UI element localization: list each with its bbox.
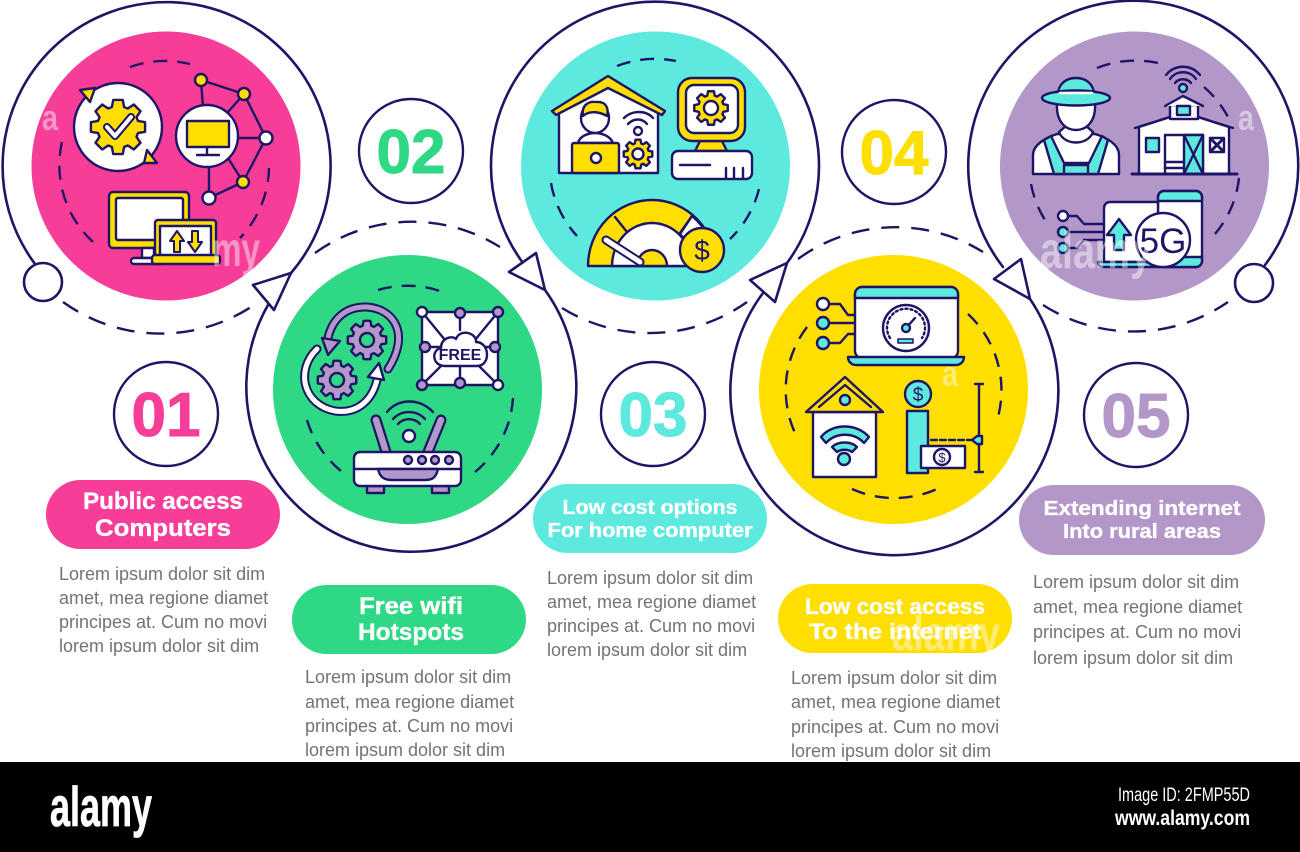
- stock watermark: a: [942, 353, 959, 394]
- text block: step 2: Lorem ipsum dolor sit dim: [305, 667, 511, 687]
- heading pill: extending internet: [1019, 485, 1265, 555]
- icon: connected barn: [1132, 67, 1237, 174]
- footer image id: Image ID: 2FMP55D: [1118, 785, 1250, 806]
- number 04: [842, 100, 946, 204]
- panel: low cost home computer: [521, 32, 790, 300]
- heading pill: low cost access: [778, 584, 1012, 653]
- icon: 5G devices: [1058, 191, 1202, 267]
- icon: networked monitor: [176, 74, 272, 204]
- stock watermark: alamy: [1040, 222, 1152, 280]
- text block: step 1: amet, mea regione diamet: [59, 588, 268, 608]
- text block: step 4: amet, mea regione diamet: [791, 692, 1000, 712]
- arrow: step 2 to 3: [509, 253, 545, 290]
- panel: public access computers: [32, 32, 300, 300]
- icon: free cloud network: [417, 307, 503, 390]
- icon: home wifi: [806, 377, 883, 477]
- text block: step 2: principes at. Cum no movi: [305, 716, 513, 736]
- stock watermark: my: [212, 224, 260, 277]
- footer website: www.alamy.com: [1114, 807, 1250, 830]
- heading pill: low cost options: Low cost options: [562, 496, 738, 519]
- icon: free cloud network: FREE: [439, 347, 482, 364]
- text block: step 5: amet, mea regione diamet: [1033, 597, 1242, 617]
- text block: step 5: principes at. Cum no movi: [1033, 622, 1241, 642]
- icon: cost slider with money: $: [913, 385, 924, 406]
- heading pill: low cost options: For home computer: [548, 519, 753, 542]
- text block: step 1: lorem ipsum dolor sit dim: [59, 636, 259, 656]
- icon: 5G devices: 5G: [1140, 222, 1186, 261]
- arrow: step 3 to 4: [750, 263, 787, 302]
- text block: step 5: lorem ipsum dolor sit dim: [1033, 648, 1233, 668]
- text block: step 1: Lorem ipsum dolor sit dim: [59, 564, 265, 584]
- icon: gear with check: [74, 83, 162, 171]
- step 2 ring and connectors: [246, 222, 576, 552]
- icon: laptop speedometer: [817, 287, 964, 365]
- stock watermark: a: [1238, 97, 1255, 138]
- footer logo: alamy: [50, 775, 152, 838]
- number 02: [359, 99, 463, 203]
- text block: step 4: Lorem ipsum dolor sit dim: [791, 668, 997, 688]
- heading pill: public access computers: [46, 480, 280, 549]
- icon: farmer: [1033, 78, 1119, 174]
- number 05: 05: [1102, 382, 1170, 451]
- heading pill: free wifi hotspots: [292, 585, 526, 654]
- heading pill: public access computers: Public access: [83, 488, 243, 515]
- icon: cost slider with money: [905, 381, 983, 473]
- text block: step 1: principes at. Cum no movi: [59, 612, 267, 632]
- text block: step 2: amet, mea regione diamet: [305, 692, 514, 712]
- text block: step 3: Lorem ipsum dolor sit dim: [547, 568, 753, 588]
- arrow: step 1 to 2: [253, 273, 291, 310]
- text block: step 3: principes at. Cum no movi: [547, 616, 755, 636]
- step 5 ring and connectors: [968, 1, 1298, 331]
- number 04: 04: [860, 119, 929, 188]
- text block: step 4: principes at. Cum no movi: [791, 717, 999, 737]
- heading pill: public access computers: Computers: [95, 515, 231, 542]
- text block: step 1: [59, 564, 268, 656]
- panel: low cost internet access: [759, 255, 1028, 524]
- number 05: [1084, 363, 1188, 467]
- text block: step 5: Lorem ipsum dolor sit dim: [1033, 572, 1239, 592]
- text block: step 3: lorem ipsum dolor sit dim: [547, 640, 747, 660]
- text block: step 4: [791, 668, 1000, 761]
- step 3 ring and connectors: [491, 2, 819, 333]
- text block: step 4: lorem ipsum dolor sit dim: [791, 741, 991, 761]
- stock watermark: a: [42, 97, 59, 138]
- heading pill: low cost access: To the internet: [809, 619, 982, 644]
- number 02: 02: [377, 118, 445, 187]
- text block: step 2: lorem ipsum dolor sit dim: [305, 740, 505, 760]
- text block: step 3: [547, 568, 756, 660]
- panel: extending internet into rural areas: [1000, 32, 1269, 300]
- number 03: 03: [619, 381, 687, 450]
- icon: speed gauge with dollar coin: $: [694, 235, 710, 266]
- number 03: [601, 362, 705, 466]
- step 4 ring and connectors: [730, 227, 1058, 555]
- text block: step 5: [1033, 572, 1242, 668]
- stock watermark: [42, 97, 1255, 661]
- icon: person working at home: [552, 76, 665, 173]
- heading pill: free wifi hotspots: Free wifi: [359, 593, 463, 620]
- number 01: 01: [132, 381, 200, 450]
- icon: desktop and laptop data exchange: [109, 192, 220, 264]
- footer bar: [0, 762, 1300, 852]
- heading pill: low cost access: Low cost access: [805, 594, 985, 619]
- stock watermark: alamy: [892, 608, 1000, 661]
- icon: monitor with settings: [672, 78, 752, 179]
- icon: speed gauge with dollar coin: [588, 200, 724, 272]
- panel: free wifi hotspots: [273, 255, 542, 524]
- heading pill: low cost options: [533, 484, 767, 553]
- number 01: [114, 362, 218, 466]
- icon: wifi router: [354, 402, 461, 493]
- heading pill: extending internet: Extending internet: [1044, 497, 1241, 520]
- heading pill: extending internet: Into rural areas: [1063, 520, 1221, 543]
- heading pill: free wifi hotspots: Hotspots: [358, 619, 464, 646]
- icon: cost slider with money: $: [938, 450, 946, 465]
- text block: step 3: amet, mea regione diamet: [547, 592, 756, 612]
- icon: rotating gears: [305, 307, 399, 411]
- arrow: step 4 to 5: [994, 259, 1030, 299]
- text block: step 2: [305, 667, 514, 760]
- step 1 ring and connectors: [3, 2, 331, 334]
